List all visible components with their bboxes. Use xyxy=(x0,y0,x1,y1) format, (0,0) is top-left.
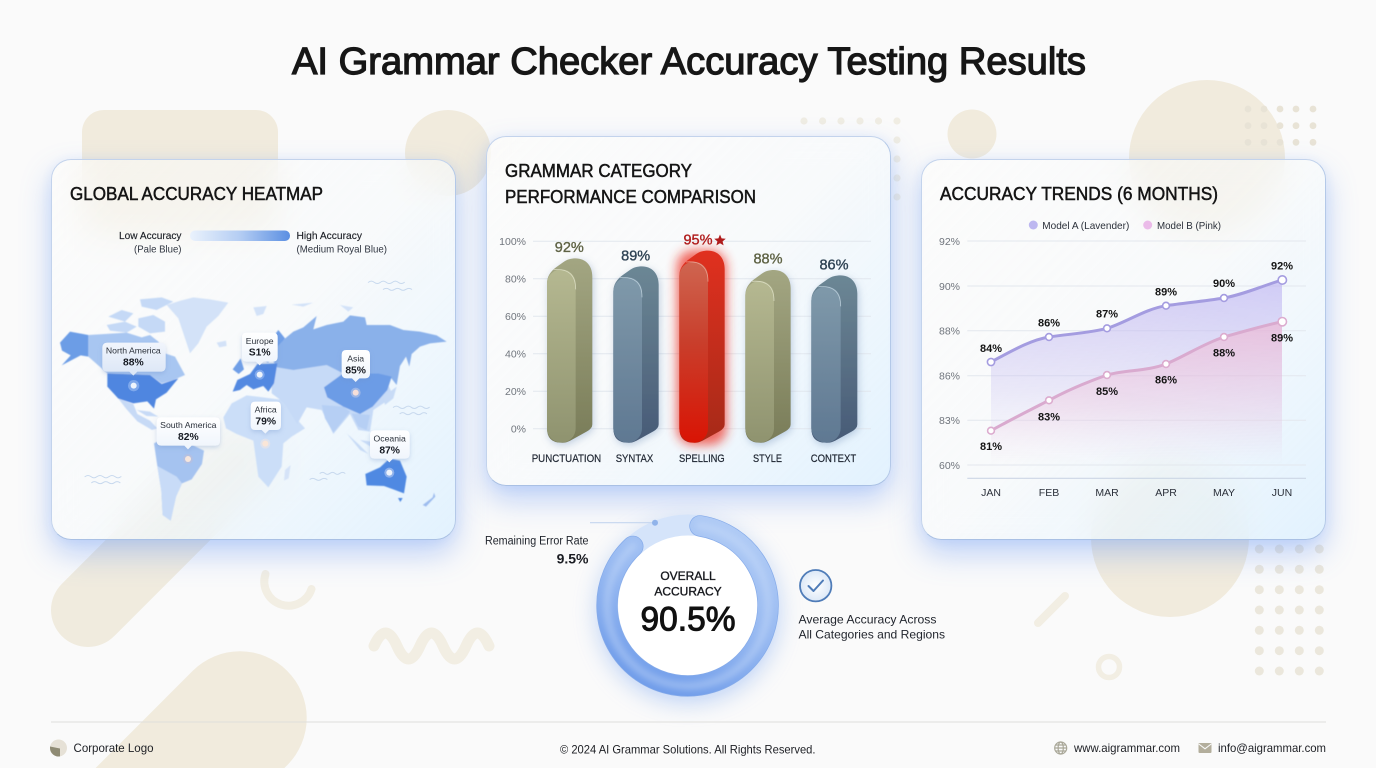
central america xyxy=(118,398,158,429)
model B value labels: 85% xyxy=(1095,386,1118,398)
bar: punctuation xyxy=(546,258,592,442)
europe xyxy=(232,363,277,391)
y axis labels: 90% xyxy=(938,280,960,292)
callout: Asia 85% xyxy=(341,349,369,397)
month labels: JAN xyxy=(981,486,1000,498)
greenland and arctic xyxy=(166,297,353,353)
callout: North America 88%: North America xyxy=(105,345,160,355)
y axis labels: 60% xyxy=(504,310,526,322)
text: email: info@aigrammar.com xyxy=(1218,741,1326,755)
heading: grammar category performance comparison xyxy=(504,160,756,206)
icon: globe xyxy=(1055,742,1067,754)
icon: star on top bar xyxy=(714,234,725,245)
india and south east asia xyxy=(321,404,369,432)
callout: Asia 85%: Asia xyxy=(347,353,364,363)
bar: context xyxy=(811,275,857,442)
text: average accuracy note: Average Accuracy Across xyxy=(798,612,936,626)
area: model A xyxy=(990,280,1282,464)
callout: Oceania 87% xyxy=(369,430,409,477)
heading: grammar category performance comparison: PERFORMANCE COMPARISON xyxy=(504,186,756,206)
bar value labels: 92% xyxy=(554,240,583,256)
continents xyxy=(59,297,446,520)
title: AI Grammar Checker Accuracy Testing Results xyxy=(292,41,1086,83)
y axis labels: 20% xyxy=(504,386,526,398)
bar: style xyxy=(745,269,790,442)
china xyxy=(323,373,391,413)
southern eurasia base xyxy=(271,362,393,433)
y axis labels: 100% xyxy=(499,236,526,248)
category labels: SPELLING xyxy=(678,452,724,464)
area: model B xyxy=(990,321,1282,464)
month labels: FEB xyxy=(1038,486,1059,498)
y axis labels: 92% xyxy=(938,236,960,248)
category labels: CONTEXT xyxy=(810,452,856,464)
model A value labels: 86% xyxy=(1037,317,1060,329)
model A value labels: 89% xyxy=(1154,286,1177,298)
category labels: SYNTAX xyxy=(615,452,653,464)
heading: grammar category performance comparison: GRAMMAR CATEGORY xyxy=(504,160,692,180)
text: copyright: © 2024 AI Grammar Solutions. All Rights Reserved. xyxy=(560,742,816,756)
panel: global accuracy heatmap xyxy=(51,159,456,540)
callout: Europe S1%: Europe xyxy=(245,335,273,345)
text: average accuracy note: All Categories and Regions xyxy=(798,628,945,642)
y axis labels: 80% xyxy=(504,273,526,285)
panel: accuracy trends xyxy=(921,159,1326,540)
south america xyxy=(153,436,203,520)
month labels: APR xyxy=(1155,486,1177,498)
callout: North America 88% xyxy=(102,342,165,391)
legend: model A and model B xyxy=(1028,220,1220,232)
callout: Europe S1% xyxy=(241,332,277,379)
alaska xyxy=(59,331,88,365)
donut chart: overall accuracy: ACCURACY xyxy=(654,584,722,598)
icon: check mark xyxy=(800,570,831,601)
model B value labels: 86% xyxy=(1154,374,1177,386)
heading: accuracy trends: ACCURACY TRENDS (6 MONTHS) xyxy=(940,184,1218,204)
panel: grammar category performance comparison xyxy=(486,136,891,486)
remaining error track xyxy=(608,525,768,686)
russia and northern asia xyxy=(269,315,446,384)
africa xyxy=(223,395,304,487)
model A value labels: 87% xyxy=(1095,308,1118,320)
line: model B xyxy=(990,321,1282,430)
icon: mail xyxy=(1198,743,1212,753)
bar: syntax xyxy=(613,266,658,442)
donut chart: overall accuracy xyxy=(598,522,778,702)
markers: model A xyxy=(987,275,1286,365)
y axis labels: 83% xyxy=(938,414,960,426)
y axis labels: 86% xyxy=(938,370,960,382)
callout: South America 82% xyxy=(156,417,219,463)
callout: Asia 85%: 85% xyxy=(345,365,365,376)
y axis labels xyxy=(499,236,526,435)
bar value labels: 88% xyxy=(753,251,782,267)
y axis labels: 88% xyxy=(938,325,960,337)
bar value labels: 89% xyxy=(621,248,650,264)
month labels: JUN xyxy=(1271,486,1292,498)
model B value labels xyxy=(979,332,1293,452)
canada xyxy=(88,332,184,383)
category labels: STYLE xyxy=(752,452,782,464)
line: model A xyxy=(990,280,1282,362)
text: website: www.aigrammar.com xyxy=(1073,741,1180,755)
bar chart xyxy=(499,232,870,464)
callout: South America 82%: 82% xyxy=(177,431,198,442)
united states xyxy=(107,373,178,408)
bar value labels: 86% xyxy=(819,257,848,273)
text: corporate logo: Corporate Logo xyxy=(74,741,154,755)
legend: low to high accuracy scale: (Medium Royal Blue) xyxy=(296,243,386,255)
model B value labels: 81% xyxy=(979,440,1002,452)
bar value labels xyxy=(554,232,848,273)
accuracy arc outline xyxy=(607,526,768,686)
legend: model A and model B: Model B (Pink) xyxy=(1156,220,1220,232)
markers: model B xyxy=(987,317,1286,434)
callout: South America 82%: South America xyxy=(160,419,216,429)
model B value labels: 89% xyxy=(1270,332,1293,344)
donut chart: overall accuracy: OVERALL xyxy=(660,569,716,583)
callout: Europe S1%: S1% xyxy=(248,347,270,358)
text: average accuracy note xyxy=(798,612,945,642)
model A value labels xyxy=(979,260,1293,354)
legend: low to high accuracy scale xyxy=(118,230,386,255)
y axis labels: 60% xyxy=(938,460,960,472)
legend: low to high accuracy scale: Low Accuracy xyxy=(118,230,182,242)
bar: spelling highlighted xyxy=(676,249,726,444)
bar value labels: 95% xyxy=(683,232,712,248)
accuracy arc xyxy=(607,526,768,686)
callout: remaining error rate: 9.5% xyxy=(557,550,589,566)
ocean wave marks xyxy=(84,281,429,483)
australia and new zealand xyxy=(365,458,406,501)
donut chart: overall accuracy: 90.5% xyxy=(640,600,736,638)
month labels: MAR xyxy=(1095,486,1119,498)
y axis labels: 0% xyxy=(510,423,526,435)
heading: global accuracy heatmap: GLOBAL ACCURACY HEATMAP xyxy=(70,184,322,204)
icon: corporate logo xyxy=(50,740,67,757)
world map with regional callouts xyxy=(59,281,446,520)
model B value labels: 83% xyxy=(1037,411,1060,423)
legend: low to high accuracy scale: High Accuracy xyxy=(296,230,362,242)
callout: remaining error rate: Remaining Error Rate xyxy=(485,536,588,548)
legend: low to high accuracy scale: (Pale Blue) xyxy=(134,243,181,255)
line chart xyxy=(938,236,1306,498)
legend: model A and model B: Model A (Lavender) xyxy=(1042,220,1129,232)
model B value labels: 88% xyxy=(1212,347,1235,359)
model A value labels: 84% xyxy=(979,342,1002,354)
callout: Oceania 87%: 87% xyxy=(379,445,399,456)
category labels: PUNCTUATION xyxy=(531,452,601,464)
callout: Africa 79% xyxy=(250,401,280,448)
month labels xyxy=(981,486,1292,498)
callout: North America 88%: 88% xyxy=(122,357,143,368)
callout: Africa 79%: Africa xyxy=(254,404,276,414)
category labels xyxy=(531,452,856,464)
y axis labels xyxy=(938,236,960,472)
callout: Africa 79%: 79% xyxy=(255,416,276,427)
bars xyxy=(546,249,857,444)
callout: Oceania 87%: Oceania xyxy=(373,433,405,443)
month labels: MAY xyxy=(1213,486,1234,498)
callout: remaining error rate xyxy=(485,520,658,566)
y axis labels: 40% xyxy=(504,348,526,360)
model A value labels: 90% xyxy=(1212,278,1235,290)
model A value labels: 92% xyxy=(1270,260,1293,272)
